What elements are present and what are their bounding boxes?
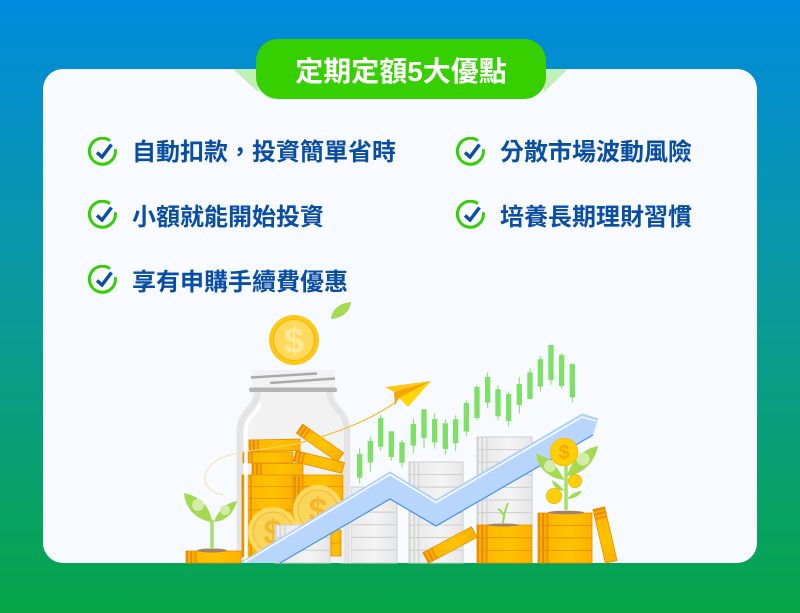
title: 定期定額5大優點 [295, 56, 507, 87]
icon: check 4 [456, 200, 485, 229]
paper plane [385, 381, 431, 407]
benefit 3: 小額就能開始投資 [132, 204, 324, 231]
icon: check 5 [88, 265, 117, 294]
top falling coin [269, 315, 319, 365]
rising arrow [241, 414, 598, 563]
benefit 4: 培養長期理財習慣 [500, 204, 692, 231]
small silver stack [275, 525, 330, 563]
leaning coin [593, 507, 617, 563]
benefit 1: 自動扣款，投資簡單省時 [132, 139, 396, 166]
flight path line [205, 402, 396, 495]
icon: check 3 [88, 200, 117, 229]
silver coin stacks [341, 437, 532, 563]
big coins in jar: $ [309, 492, 328, 530]
coins with money plant [536, 438, 598, 563]
icon: check 2 [456, 137, 485, 166]
icon: leaf [331, 302, 351, 319]
coins in jar [242, 424, 345, 557]
big coins in jar: $ [264, 514, 283, 552]
big coins in jar [248, 485, 343, 557]
coins with money plant: $ [558, 442, 570, 464]
left coin with sprout [184, 493, 241, 563]
candlestick chart [357, 345, 575, 483]
benefit 2: 分散市場波動風險 [500, 139, 692, 166]
panel: white card [43, 69, 757, 563]
top falling coin: $ [284, 320, 304, 361]
icon: check 1 [88, 137, 117, 166]
fallen coin [423, 527, 477, 563]
jar highlight [246, 403, 260, 563]
benefit 5: 享有申購手續費優惠 [132, 269, 348, 296]
glass jar [236, 370, 351, 563]
coins with sprout [477, 503, 532, 563]
title [256, 39, 546, 99]
